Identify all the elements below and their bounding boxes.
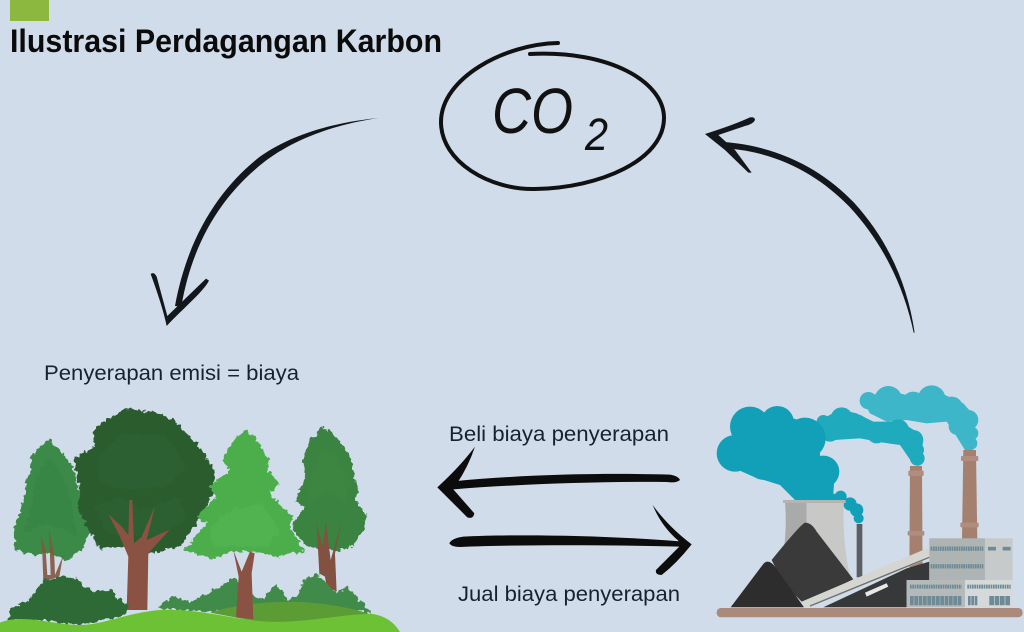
smoke: top plume <box>860 385 978 450</box>
label: sell: Jual biaya penyerapan <box>458 583 680 606</box>
coal piles <box>731 523 853 607</box>
chimney: middle <box>908 466 924 580</box>
illustration: power plant <box>717 385 1023 617</box>
chimney: right <box>960 450 979 540</box>
tree: large dark <box>73 408 215 610</box>
bushes: back <box>157 573 372 613</box>
arrow: sell (rightward) <box>449 505 692 575</box>
chimney: small <box>857 524 862 577</box>
conveyor <box>802 547 929 607</box>
label: absorption cost: Penyerapan emisi = biaya <box>44 361 299 385</box>
tree: left <box>13 438 90 582</box>
CO2 circled label: CO <box>492 75 573 147</box>
main building <box>907 538 1013 607</box>
title: Ilustrasi Perdagangan Karbon <box>10 23 442 59</box>
green accent block <box>10 0 49 21</box>
CO2 circled label: 2 <box>584 109 608 160</box>
smoke: middle plume <box>817 407 925 466</box>
cooling tower <box>783 500 850 577</box>
CO2 circled label <box>441 43 664 189</box>
tree: right slim <box>292 427 367 592</box>
arrow: buy (leftward) <box>437 447 680 518</box>
tree: light conifer <box>183 431 305 619</box>
arrow: factory to CO2 <box>705 117 915 333</box>
hill: mid <box>210 602 372 623</box>
ground <box>0 610 400 632</box>
ground base <box>717 608 1023 617</box>
bush: front left <box>8 577 128 625</box>
arrow: CO2 to forest <box>151 118 379 326</box>
illustration: forest <box>0 408 400 632</box>
smoke: large cloud <box>717 406 864 523</box>
label: buy: Beli biaya penyerapan <box>449 423 669 446</box>
